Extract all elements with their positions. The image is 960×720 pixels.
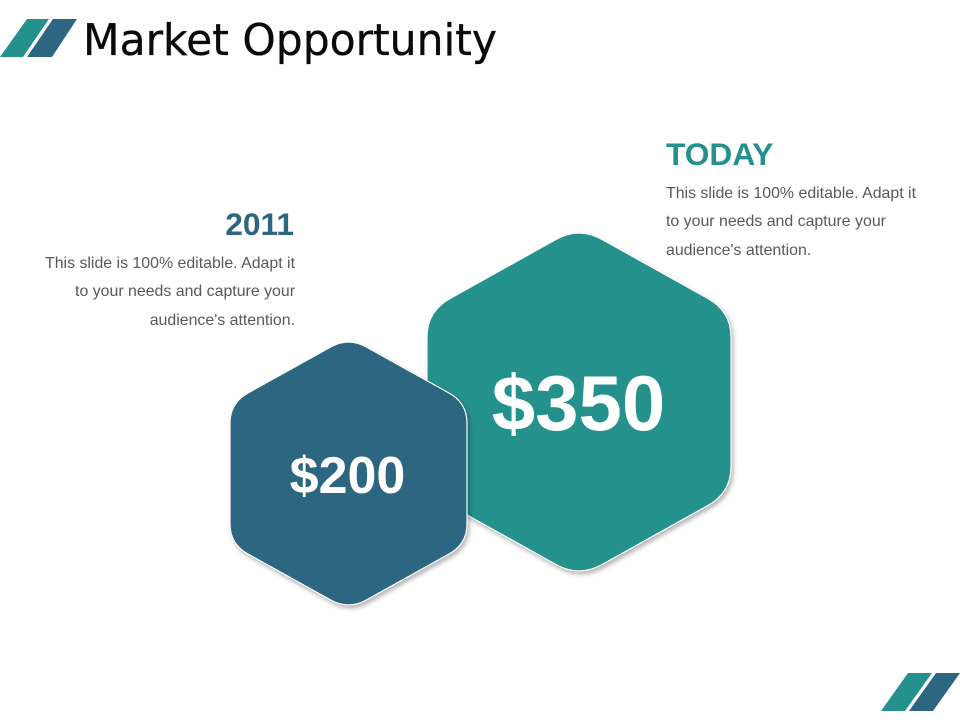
description: 2011	[45, 255, 296, 329]
text block: 2011	[45, 206, 296, 329]
heading: 2011: 2011	[225, 206, 294, 242]
description: today	[666, 185, 917, 259]
icon: bottom-right logo stripes	[881, 673, 960, 711]
description: today: This slide is 100% editable. Adapt it	[666, 185, 917, 202]
description: 2011: This slide is 100% editable. Adapt it	[45, 255, 296, 272]
description: today: to your needs and capture your	[666, 213, 887, 230]
hexagon: 2011 value	[230, 342, 467, 605]
value: $350: $350	[492, 359, 665, 447]
text block: today	[666, 136, 917, 259]
title: Market Opportunity	[83, 15, 497, 66]
description: 2011: audience's attention.	[150, 312, 295, 329]
description: 2011: to your needs and capture your	[75, 283, 296, 300]
value: $200: $200	[290, 447, 405, 505]
description: today: audience's attention.	[666, 242, 811, 259]
icon: top-left logo stripes	[0, 19, 77, 57]
heading: today: TODAY	[666, 136, 773, 172]
hexagon: today value	[427, 233, 731, 571]
